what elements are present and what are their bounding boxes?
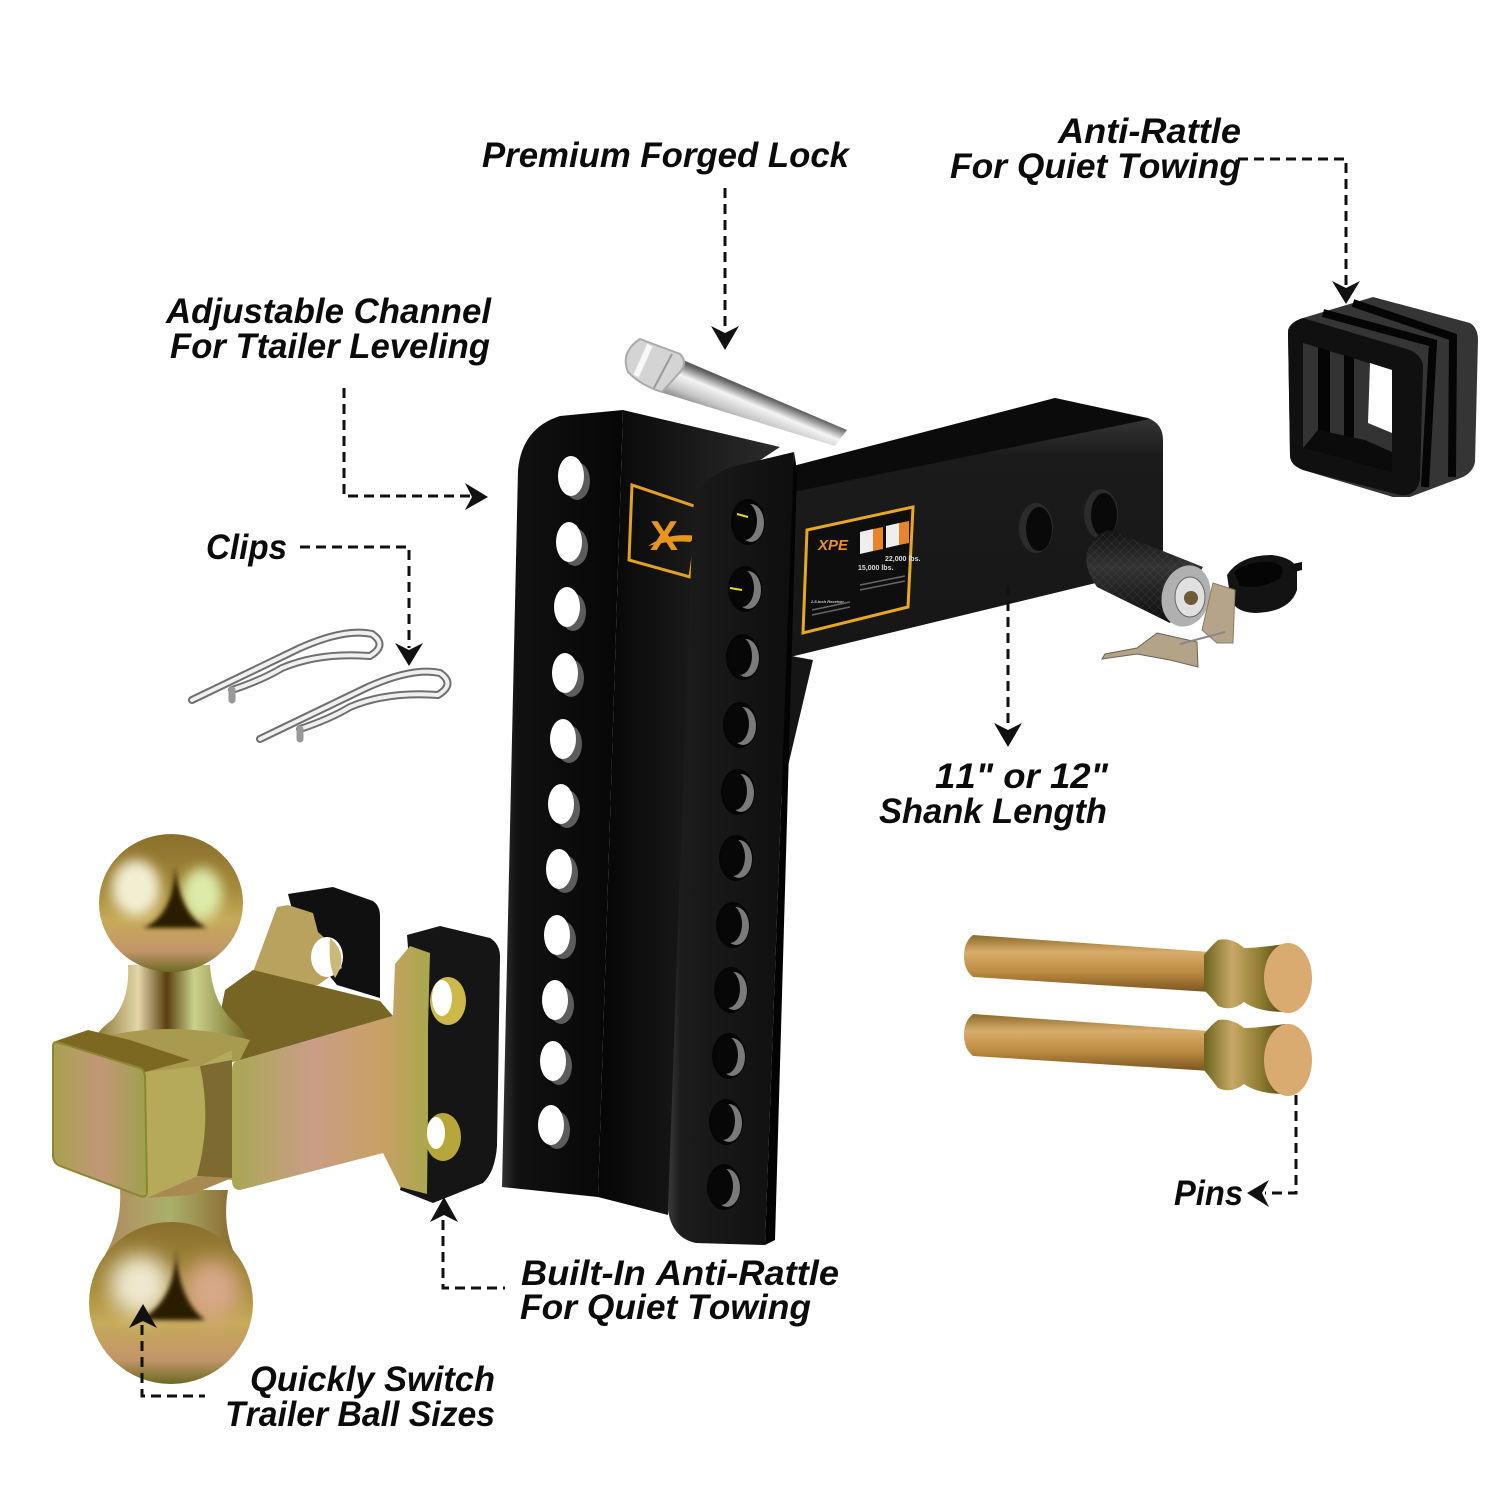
bottom neck	[105, 1190, 235, 1255]
heading: adjustable channel: Adjustable Channel	[165, 292, 492, 331]
arrow: shank length callout	[994, 585, 1022, 747]
label on shank	[803, 507, 920, 633]
arrow: clips callout	[300, 547, 423, 666]
icon: anti-rattle insert	[1288, 297, 1478, 497]
back flange holes	[558, 456, 590, 500]
icon: forged lock pin	[626, 339, 847, 446]
icon: hitch clips	[192, 633, 448, 739]
panel: adjustable channel	[502, 398, 1163, 1245]
heading: anti-rattle for quiet towing: Anti-Rattle	[1057, 112, 1241, 151]
label on shank: 2.5-Inch Receiver	[810, 599, 844, 604]
heading: trailer ball sizes	[225, 1360, 495, 1434]
heading: anti-rattle for quiet towing	[950, 112, 1241, 186]
heading: built-in anti-rattle: For Quiet Towing	[520, 1288, 811, 1327]
heading: trailer ball sizes: Quickly Switch	[250, 1360, 495, 1399]
back flange	[502, 410, 623, 1197]
label on shank: 15,000 lbs.	[858, 565, 893, 572]
back plate web	[598, 410, 780, 1215]
heading: anti-rattle for quiet towing: For Quiet Towing	[950, 147, 1241, 186]
front flange holes	[731, 499, 765, 545]
front flange	[668, 452, 794, 1245]
bottom ball	[89, 1222, 253, 1384]
orange logo on plate	[629, 485, 700, 577]
rear anti-rattle pad	[288, 887, 380, 998]
arrow: anti-rattle callout	[1238, 159, 1360, 304]
heading: built-in anti-rattle: Built-In Anti-Rattle	[521, 1254, 839, 1293]
icon: trailer ball mount	[53, 834, 500, 1384]
heading: adjustable channel: For Ttailer Leveling	[170, 327, 490, 366]
rear bracket	[253, 905, 342, 985]
label on shank: XPE	[817, 537, 849, 554]
front anti-rattle pad	[400, 926, 500, 1203]
heading: pins: Pins	[1174, 1174, 1243, 1213]
support gusset	[777, 655, 813, 860]
label on shank: 22,000 lbs.	[885, 556, 920, 563]
top ball	[99, 834, 243, 972]
heading: built-in anti-rattle	[520, 1254, 839, 1327]
cube	[145, 1050, 232, 1198]
arrow: pins callout	[1247, 1095, 1296, 1207]
icon: receiver lock and keys	[1086, 530, 1302, 667]
heading: shank length	[879, 757, 1108, 831]
heading: premium forged lock: Premium Forged Lock	[482, 136, 851, 175]
heading: shank length: Shank Length	[879, 792, 1107, 831]
arrow: anti-rattle built-in callout	[430, 1197, 505, 1288]
shank holes	[1019, 503, 1053, 553]
arrow: lock callout	[711, 188, 739, 350]
flange holes	[430, 977, 466, 1025]
heading: trailer ball sizes: Trailer Ball Sizes	[225, 1395, 495, 1434]
mount top face	[215, 970, 393, 1061]
orange logo on plate: X	[650, 512, 678, 559]
mount side face	[232, 946, 430, 1194]
top neck	[90, 965, 250, 1048]
arrow: channel callout	[344, 388, 488, 510]
heading: shank length: 11" or 12"	[935, 757, 1108, 796]
shank tube	[786, 398, 1163, 658]
arrow: trailer ball callout	[129, 1304, 205, 1396]
icon: gold pins	[964, 935, 1312, 1096]
heading: adjustable channel	[165, 292, 492, 366]
heading: clips: Clips	[206, 528, 287, 567]
